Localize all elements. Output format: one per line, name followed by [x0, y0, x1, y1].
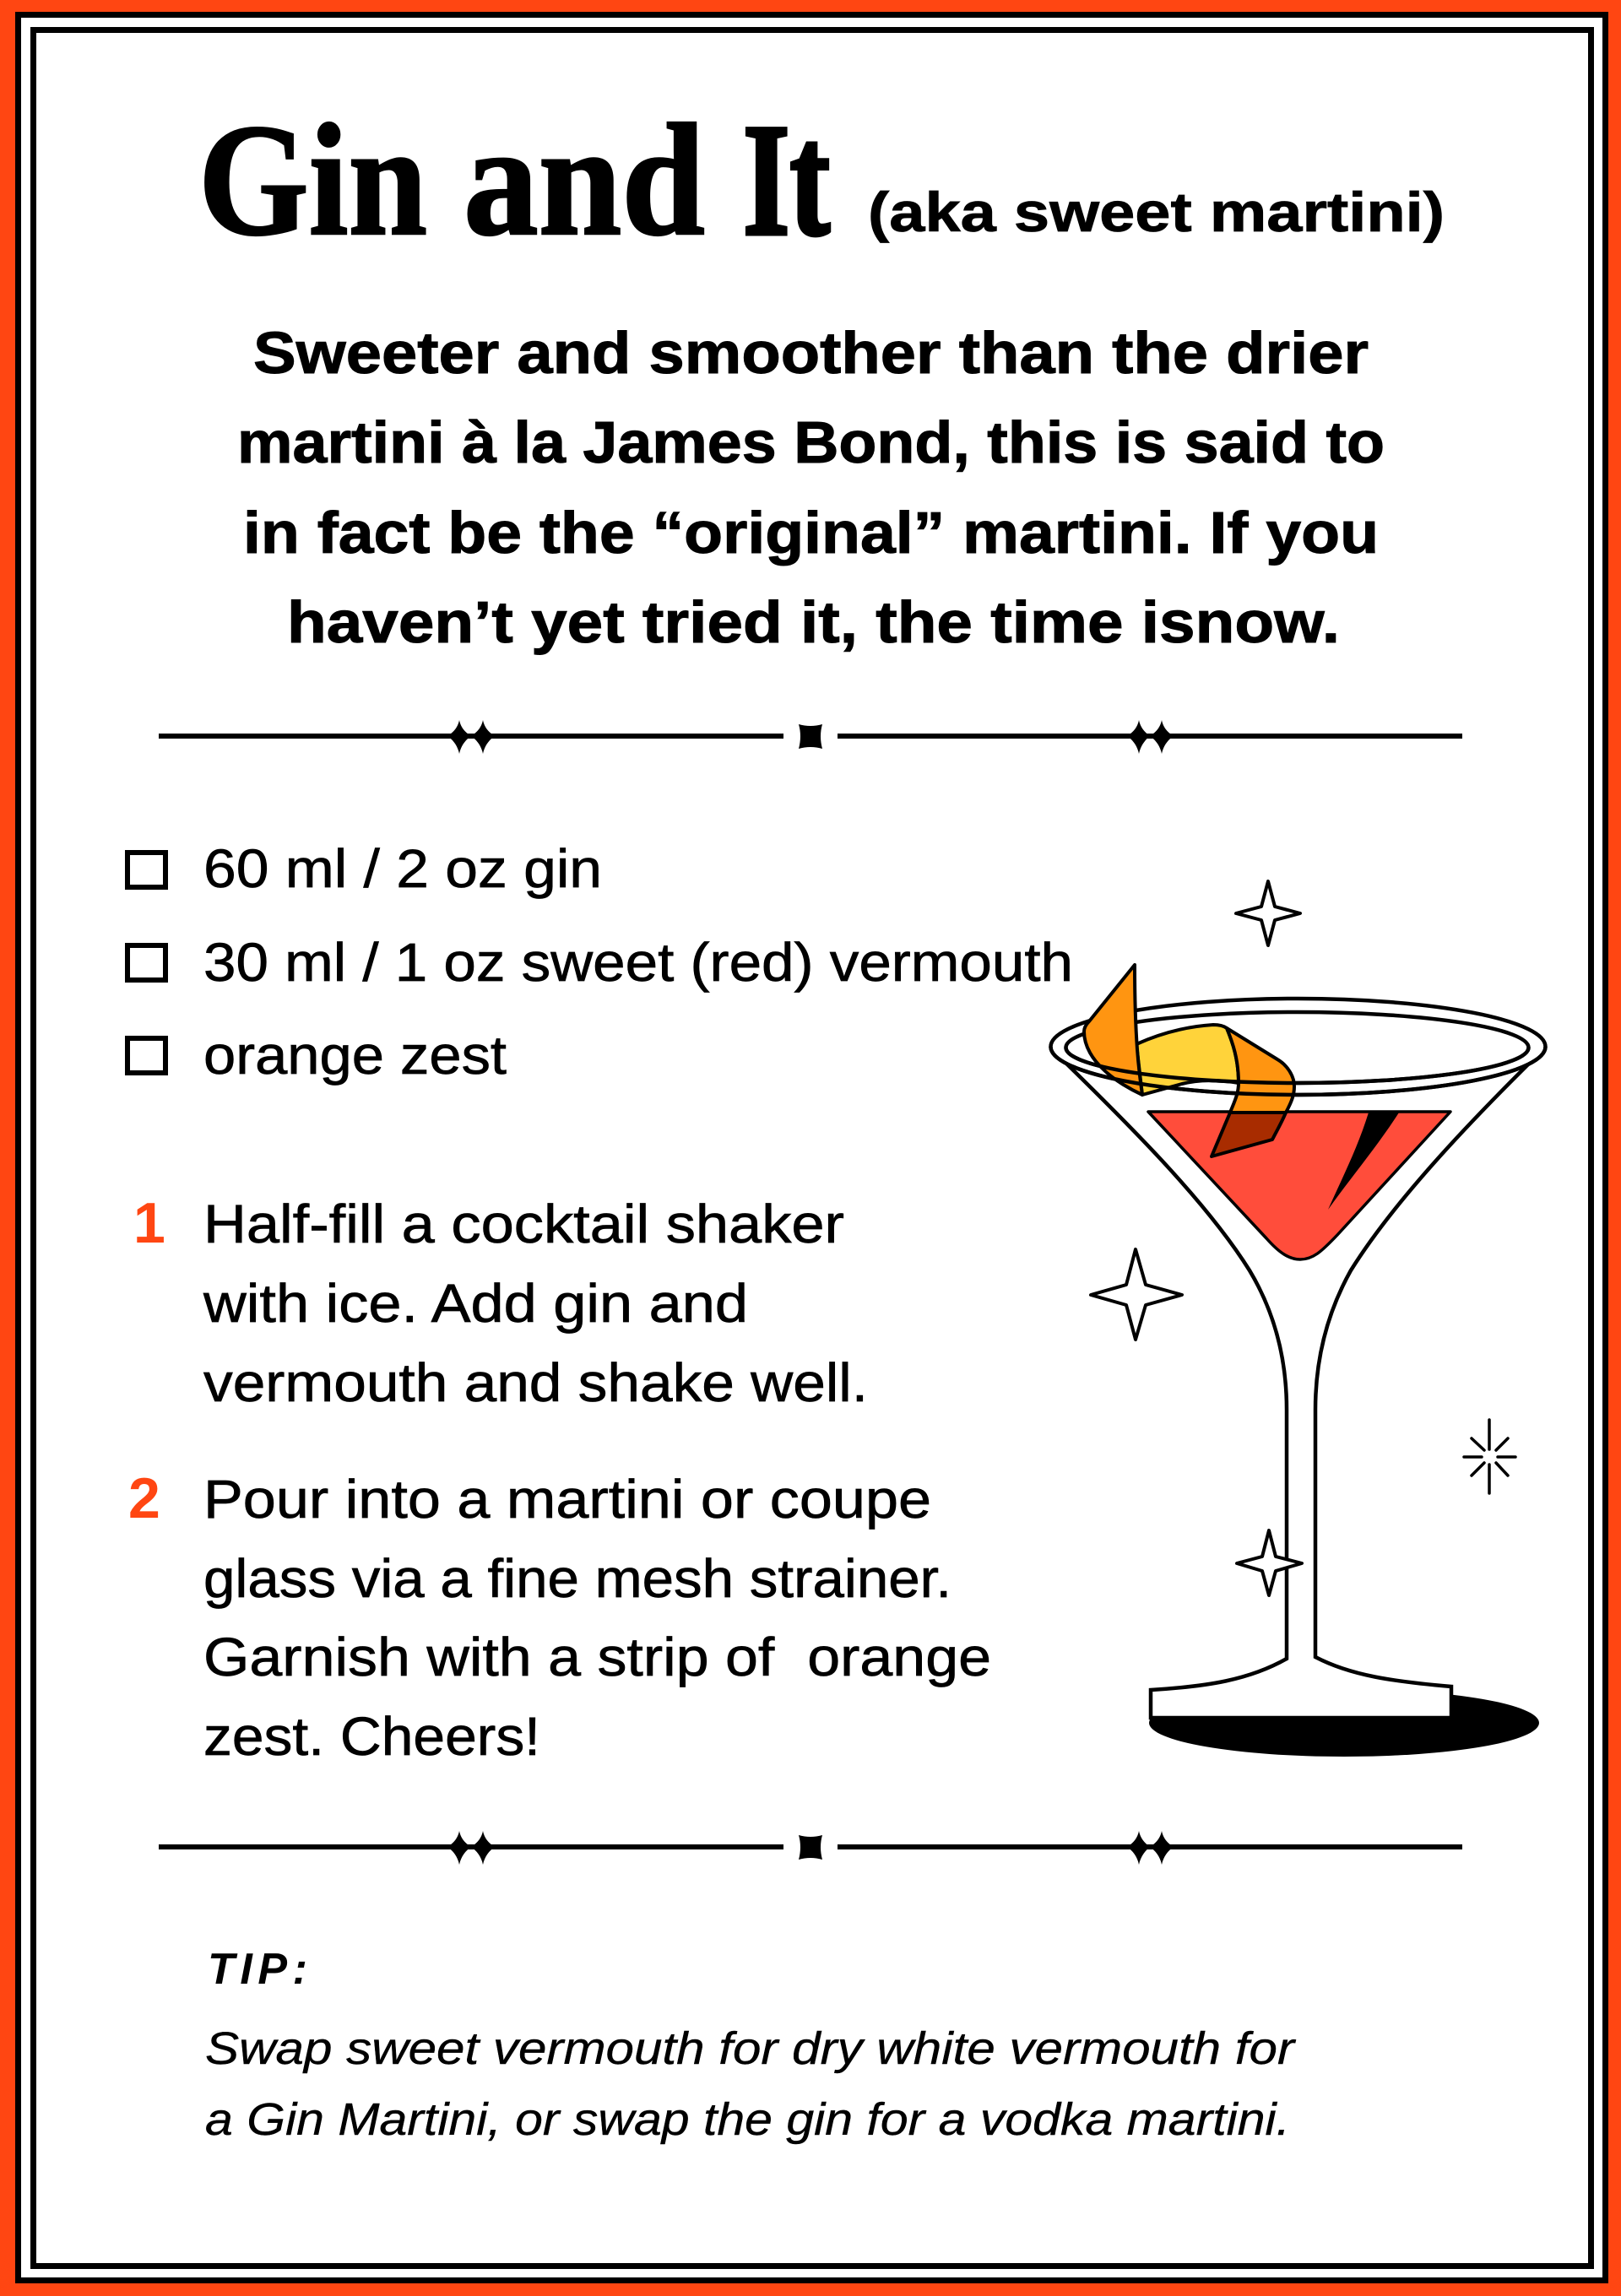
illustration: martini glass — [1050, 965, 1545, 1757]
tip text — [205, 2023, 1296, 2145]
zest dark end — [1212, 1113, 1286, 1156]
rim — [1050, 999, 1545, 1095]
liquid — [1148, 1112, 1450, 1259]
step 1 — [133, 1191, 868, 1413]
step 1 text: vermouth and shake well. — [203, 1352, 868, 1413]
intro text: Sweeter and smoother than the drier — [253, 320, 1369, 386]
top divider — [159, 720, 1462, 754]
step 2 text: Garnish with a strip of orange — [203, 1627, 991, 1687]
intro text: haven’t yet tried it, the time isnow. — [287, 589, 1340, 655]
sparkle star 3 — [1237, 1530, 1302, 1595]
intro text: martini à la James Bond, this is said to — [237, 409, 1385, 475]
tip text: Swap sweet vermouth for dry white vermouth for — [205, 2023, 1296, 2074]
ingredient 2: 30 ml / 1 oz sweet (red) vermouth — [203, 932, 1073, 993]
step 2 text — [203, 1469, 991, 1767]
title: It — [743, 92, 830, 269]
sparkle burst — [1464, 1420, 1515, 1493]
ingredients list — [127, 838, 1073, 1086]
intro text — [237, 320, 1385, 655]
ingredient 1: 60 ml / 2 oz gin — [203, 838, 602, 899]
checkbox 3 — [127, 1038, 165, 1073]
step 2 text: Pour into a martini or coupe — [203, 1469, 931, 1530]
subtitle: (aka sweet martini) — [868, 181, 1445, 243]
orange zest garnish — [1084, 965, 1294, 1156]
step 2 text: glass via a fine mesh strainer. — [203, 1548, 951, 1609]
step 2 text: zest. Cheers! — [203, 1706, 540, 1767]
bottom divider — [159, 1831, 1462, 1865]
step number 2: 2 — [128, 1466, 160, 1530]
title: and — [464, 92, 705, 269]
rim front over garnish — [1050, 1047, 1545, 1095]
zest yellow inner side — [1136, 1025, 1239, 1095]
glass body and stem — [1060, 1058, 1535, 1718]
ingredient 3: orange zest — [203, 1025, 507, 1086]
tip heading: TIP: — [208, 1945, 307, 1994]
step 1 text: with ice. Add gin and — [203, 1273, 748, 1334]
tip text: a Gin Martini, or swap the gin for a vodka martini. — [205, 2094, 1290, 2145]
intro text: in fact be the “original” martini. If you — [243, 500, 1379, 566]
zest tip — [1084, 965, 1142, 1095]
sparkle star 1 — [1236, 881, 1300, 945]
step 1 text: Half-fill a cocktail shaker — [203, 1194, 844, 1254]
step number 1: 1 — [133, 1191, 165, 1255]
shadow — [1149, 1689, 1539, 1757]
sparkle star 2 — [1091, 1249, 1182, 1340]
step 2 — [128, 1466, 991, 1767]
title — [198, 92, 830, 269]
liquid highlight — [1328, 1113, 1399, 1210]
step 1 text — [203, 1194, 868, 1413]
checkbox 2 — [127, 945, 165, 980]
title: Gin — [198, 92, 427, 269]
zest band — [1227, 1028, 1294, 1113]
checkbox 1 — [127, 853, 165, 887]
